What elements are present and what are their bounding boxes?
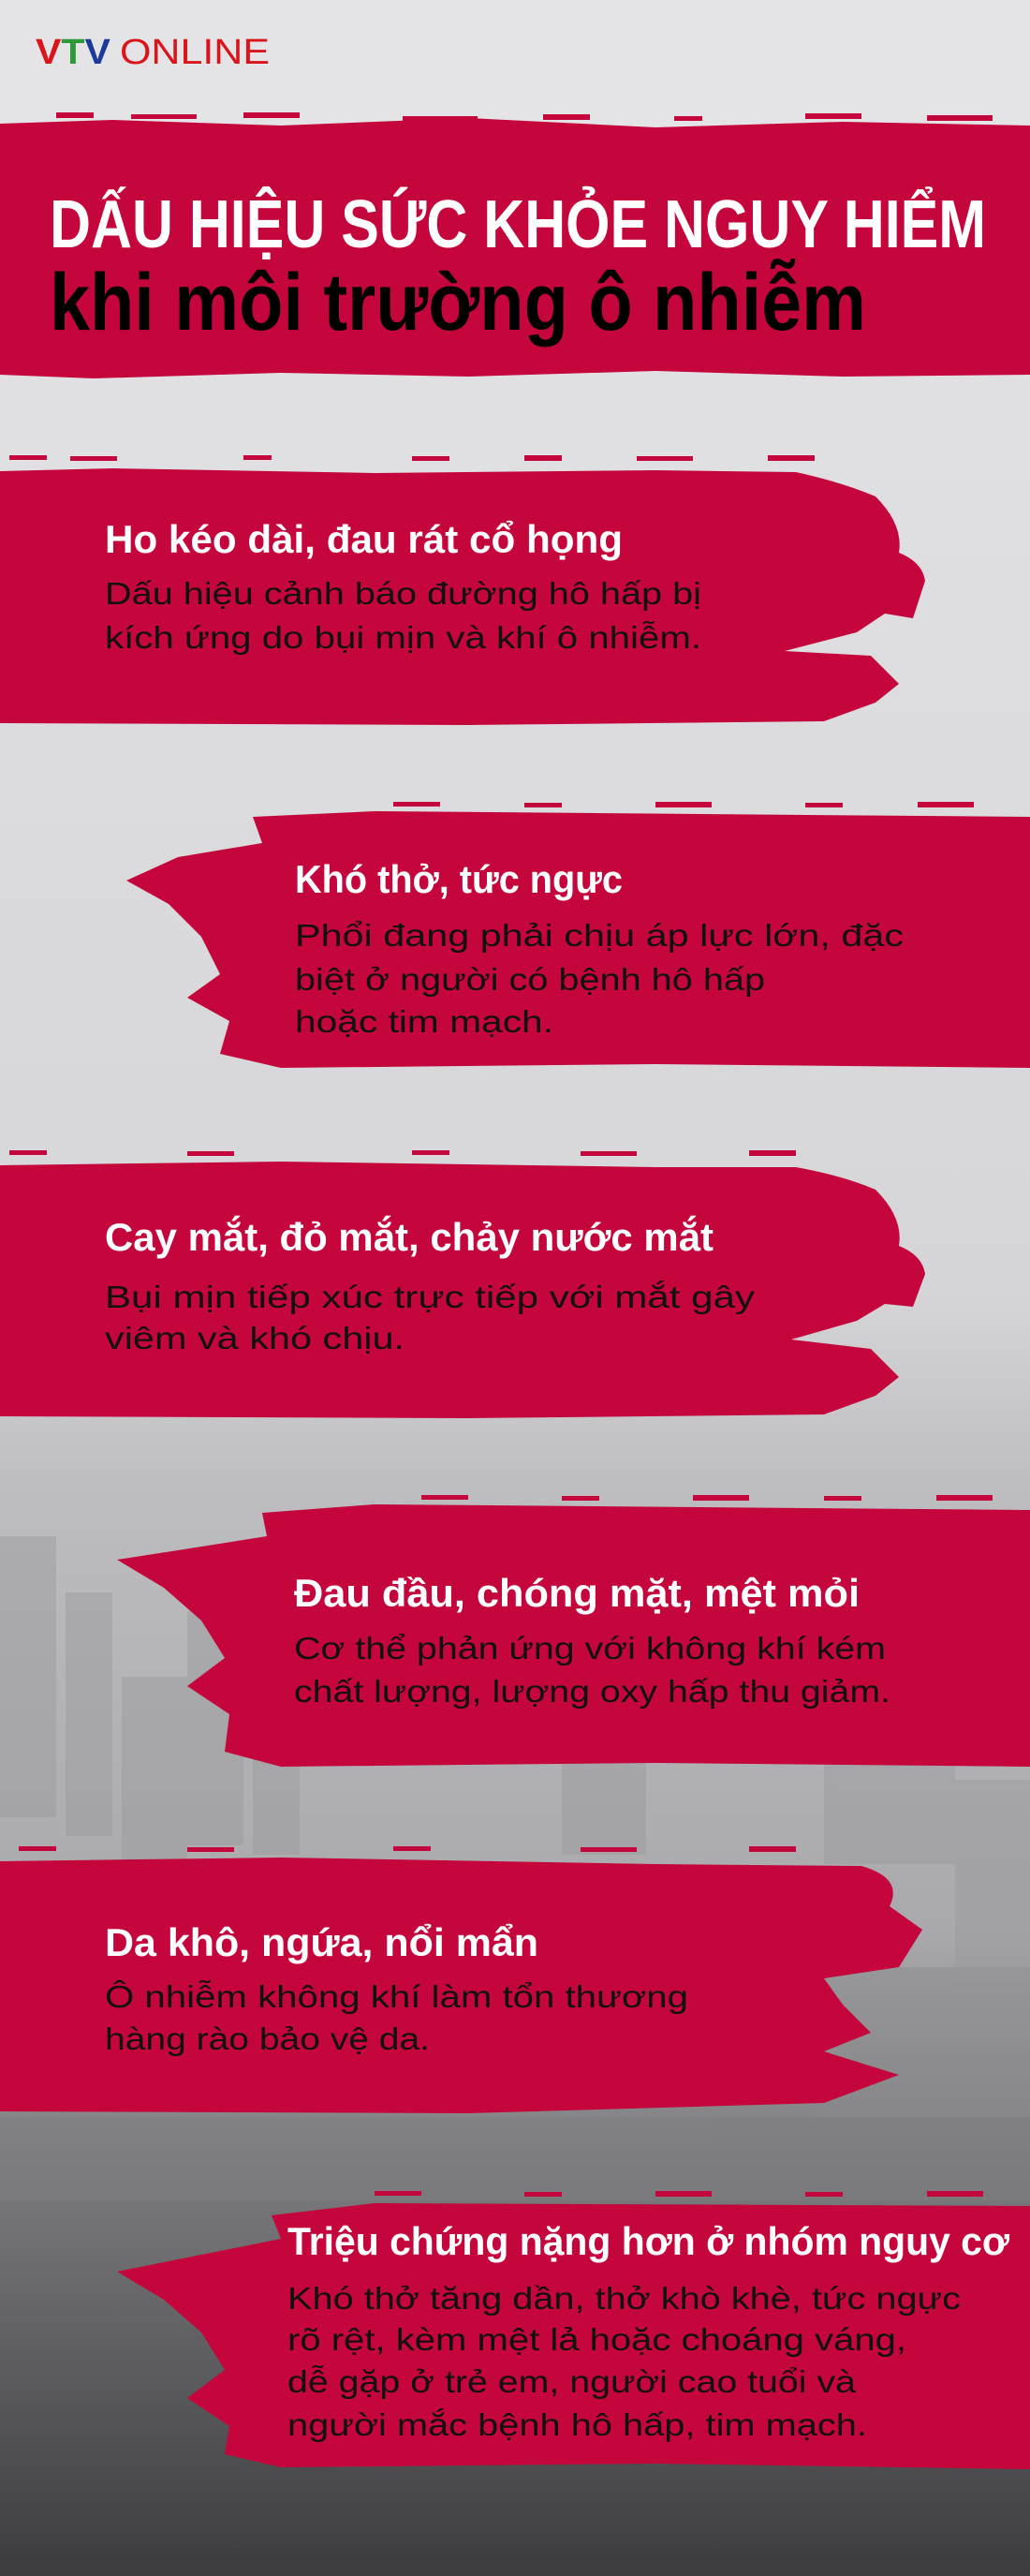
- body 4: chất lượng, lượng oxy hấp thu giảm.: [294, 1674, 890, 1709]
- body 2: Phổi đang phải chịu áp lực lớn, đặc: [295, 918, 904, 953]
- body 1: kích ứng do bụi mịn và khí ô nhiễm.: [105, 620, 701, 655]
- panel 4: headache: [117, 1495, 1030, 1767]
- body 5: [105, 1979, 688, 2056]
- logo: [36, 33, 270, 72]
- heading 3: Cay mắt, đỏ mắt, chảy nước mắt: [105, 1214, 714, 1259]
- body 4: Cơ thể phản ứng với không khí kém: [294, 1631, 886, 1666]
- logo: ONLINE: [120, 33, 270, 72]
- body 2: biệt ở người có bệnh hô hấp: [295, 962, 765, 997]
- body 6: dễ gặp ở trẻ em, người cao tuổi và: [287, 2364, 857, 2399]
- body 1: Dấu hiệu cảnh báo đường hô hấp bị: [105, 576, 701, 611]
- panel 2: breathless: [126, 802, 1030, 1068]
- panel 1: cough: [0, 455, 925, 725]
- heading 4: Đau đầu, chóng mặt, mệt mỏi: [294, 1571, 860, 1615]
- body 6: rõ rệt, kèm mệt lả hoặc choáng váng,: [287, 2322, 906, 2357]
- logo: VTV: [36, 33, 111, 72]
- panel 6: severe symptoms: [117, 2191, 1030, 2469]
- body 4: [294, 1631, 890, 1709]
- panel 3: eyes: [0, 1150, 925, 1418]
- body 5: hàng rào bảo vệ da.: [105, 2021, 430, 2056]
- body 2: [295, 918, 904, 1039]
- body 3: viêm và khó chịu.: [105, 1321, 405, 1355]
- title line 2: khi môi trường ô nhiễm: [50, 258, 866, 348]
- body 6: [287, 2281, 961, 2442]
- body 3: Bụi mịn tiếp xúc trực tiếp với mắt gây: [105, 1280, 756, 1314]
- heading 2: Khó thở, tức ngực: [295, 857, 623, 901]
- body 2: hoặc tim mạch.: [295, 1004, 553, 1039]
- body 3: [105, 1280, 756, 1355]
- body 5: Ô nhiễm không khí làm tổn thương: [105, 1979, 688, 2014]
- title banner: [0, 112, 1030, 378]
- heading 5: Da khô, ngứa, nổi mẩn: [105, 1920, 538, 1964]
- body 1: [105, 576, 701, 655]
- heading 1: Ho kéo dài, đau rát cổ họng: [105, 517, 623, 561]
- body 6: Khó thở tăng dần, thở khò khè, tức ngực: [287, 2281, 961, 2316]
- body 6: người mắc bệnh hô hấp, tim mạch.: [287, 2407, 867, 2442]
- heading 6: Triệu chứng nặng hơn ở nhóm nguy cơ: [287, 2219, 1009, 2263]
- panel 5: skin: [0, 1846, 922, 2113]
